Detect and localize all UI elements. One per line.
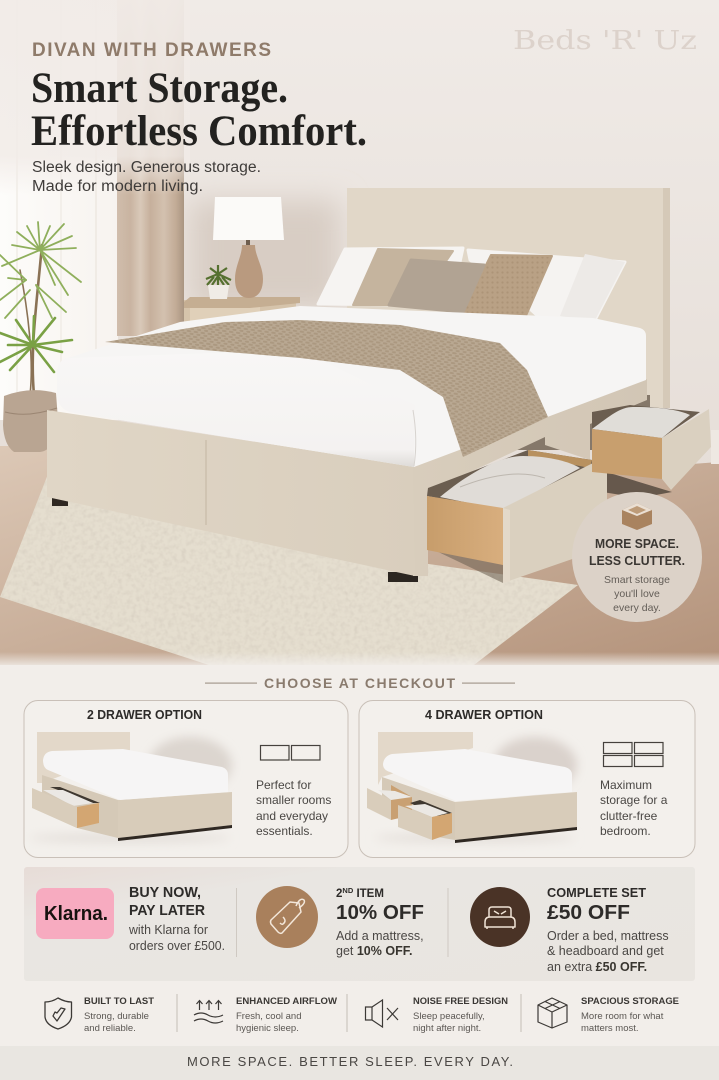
icon: price tag <box>256 886 318 948</box>
offer: second item: 2 <box>336 888 342 900</box>
icon: shield <box>45 998 72 1029</box>
hero photo: bedroom scene <box>0 0 719 670</box>
main title <box>31 65 367 155</box>
feature: noise free design: NOISE FREE DESIGN <box>413 996 508 1007</box>
feature: spacious storage: SPACIOUS STORAGE <box>581 996 679 1007</box>
rug <box>0 474 578 668</box>
badge: more space less clutter: MORE SPACE. <box>595 537 679 551</box>
offer: complete set <box>470 885 669 974</box>
feature: built to last <box>45 996 154 1034</box>
offer: second item: ITEM <box>353 888 384 900</box>
description: Maximum <box>600 778 652 792</box>
offer: complete set: Order a bed, mattress <box>547 929 669 943</box>
rear drawer <box>592 405 711 490</box>
icon: two drawers <box>260 746 320 760</box>
description: storage for a <box>600 793 668 807</box>
footer strip <box>0 1046 719 1080</box>
intro text <box>32 159 261 195</box>
panel: 2 drawer option <box>24 700 348 858</box>
feature: enhanced airflow: Fresh, cool and <box>236 1011 301 1022</box>
heading: 4 drawer: 4 DRAWER OPTION <box>425 708 543 722</box>
description: clutter-free <box>600 809 658 823</box>
features row <box>45 994 679 1034</box>
description: bedroom. <box>600 824 651 838</box>
feature: noise free design: night after night. <box>413 1023 481 1034</box>
icon: airflow <box>194 1000 223 1023</box>
small plant <box>206 265 231 299</box>
heading: 2 drawer: 2 DRAWER OPTION <box>87 708 202 722</box>
offer: second item: ND <box>342 886 354 895</box>
feature: built to last: and reliable. <box>84 1023 136 1034</box>
description <box>256 778 331 838</box>
nightstand <box>184 297 300 326</box>
offer: klarna: with Klarna for <box>128 923 208 937</box>
feature: enhanced airflow: ENHANCED AIRFLOW <box>236 996 337 1007</box>
window with sheer curtain <box>0 0 118 420</box>
headboard <box>347 188 670 408</box>
feature: spacious storage: More room for what <box>581 1011 664 1022</box>
offer: klarna <box>36 885 225 953</box>
subheading: divan with drawers: DIVAN WITH DRAWERS <box>32 40 271 61</box>
feature: built to last: BUILT TO LAST <box>84 996 154 1007</box>
offer: complete set: COMPLETE SET <box>547 885 646 900</box>
watermark: Beds 'R' Uz <box>513 26 697 56</box>
badge: more space less clutter: you'll love <box>614 588 660 600</box>
mattress <box>57 306 646 467</box>
description: Perfect for <box>256 778 311 792</box>
bed base with storage <box>47 379 672 583</box>
panel: 4 drawer option <box>359 700 695 858</box>
offer: second item: Add a mattress, <box>336 929 424 943</box>
main title: Smart Storage. <box>31 65 288 112</box>
feature: spacious storage <box>538 996 679 1034</box>
footer strip: MORE SPACE. BETTER SLEEP. EVERY DAY. <box>187 1054 513 1069</box>
feature: spacious storage: matters most. <box>581 1023 639 1034</box>
offers band <box>24 867 695 981</box>
klarna logo: Klarna. <box>44 903 108 925</box>
offer: complete set: an extra £50 OFF. <box>547 960 647 974</box>
feature: enhanced airflow: hygienic sleep. <box>236 1023 299 1034</box>
offer: klarna: BUY NOW, <box>129 885 201 901</box>
feature: built to last: Strong, durable <box>84 1011 149 1022</box>
badge: more space less clutter: every day. <box>613 602 661 614</box>
offer: klarna: PAY LATER <box>129 903 206 919</box>
bed image: 2 drawers <box>30 732 232 843</box>
offer: klarna: orders over £500. <box>129 939 225 953</box>
throw blanket <box>105 320 548 457</box>
offer: second item: get 10% OFF. <box>336 944 412 958</box>
main title: Effortless Comfort. <box>31 108 367 155</box>
badge: more space less clutter: LESS CLUTTER. <box>589 554 685 568</box>
icon: muted speaker <box>366 1000 398 1027</box>
description: and everyday <box>256 809 328 823</box>
icon: bed <box>470 887 530 947</box>
offer: complete set: £50 OFF <box>547 902 630 924</box>
intro text: Sleek design. Generous storage. <box>32 159 261 176</box>
intro text: Made for modern living. <box>32 178 203 195</box>
badge: more space less clutter <box>572 492 702 622</box>
icon: box <box>622 503 652 530</box>
badge: more space less clutter: Smart storage <box>604 574 670 586</box>
description: smaller rooms <box>256 793 331 807</box>
floor <box>0 446 719 670</box>
bottom section background <box>0 665 719 1080</box>
pillows <box>318 248 625 322</box>
bed image: 4 drawers <box>367 732 577 843</box>
offer: second item: 10% OFF <box>336 902 424 924</box>
description: essentials. <box>256 824 313 838</box>
curtain <box>117 0 184 336</box>
floor plant <box>0 222 81 452</box>
section heading: choose at checkout: CHOOSE AT CHECKOUT <box>264 675 455 691</box>
lamp <box>213 197 284 298</box>
klarna logo <box>36 888 114 939</box>
offer: second item <box>256 886 424 958</box>
front drawer <box>427 450 607 583</box>
description <box>600 778 668 838</box>
feature: noise free design <box>366 996 508 1034</box>
icon: parcel box <box>538 998 567 1028</box>
feature: noise free design: Sleep peacefully, <box>413 1011 485 1022</box>
offer: complete set: & headboard and get <box>547 944 664 958</box>
icon: four drawers <box>604 742 663 766</box>
feature: enhanced airflow <box>194 996 337 1034</box>
